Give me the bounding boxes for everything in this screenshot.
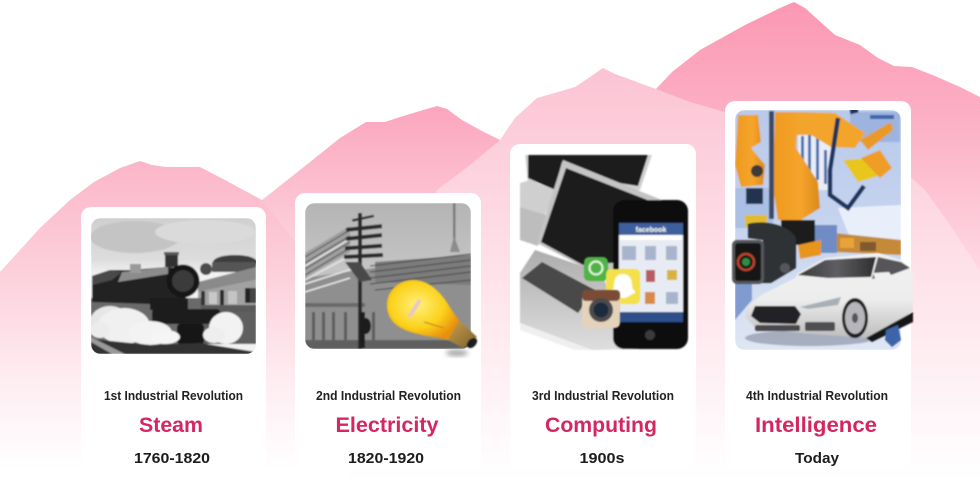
icon: whatsapp bbox=[584, 257, 608, 281]
years: 1900s: 1900s bbox=[580, 451, 624, 467]
heading: Electricity: Electricity bbox=[336, 414, 439, 437]
photo: steam locomotive bbox=[90, 218, 257, 354]
card 2: electricity bbox=[295, 193, 481, 469]
label: 4th revolution: 4th Industrial Revolution bbox=[746, 389, 888, 403]
heading: Computing: Computing bbox=[545, 414, 657, 437]
heading: Intelligence: Intelligence bbox=[755, 414, 877, 437]
years: 1760-1820: 1760-1820 bbox=[134, 451, 210, 467]
card 1: steam bbox=[81, 207, 266, 469]
label: 2nd revolution: 2nd Industrial Revolution bbox=[316, 389, 461, 403]
years: 1820-1920: 1820-1920 bbox=[348, 451, 424, 467]
icon: light bulb bbox=[387, 280, 479, 356]
photo: laptops and smartphone: facebook bbox=[636, 227, 666, 234]
period: Today: Today bbox=[795, 451, 839, 467]
heading: Steam: Steam bbox=[139, 414, 203, 437]
icon: instagram bbox=[582, 290, 620, 328]
icon: snapchat bbox=[606, 269, 640, 304]
label: 1st revolution: 1st Industrial Revolution bbox=[104, 389, 243, 403]
label: 3rd revolution: 3rd Industrial Revolution bbox=[532, 389, 674, 403]
photo: robot arms bbox=[735, 110, 901, 350]
icon: smart watch bbox=[732, 223, 796, 284]
card 4: intelligence bbox=[725, 101, 913, 469]
icon: white electric car bbox=[745, 253, 913, 347]
photo: telegraph pole and buildings bbox=[305, 203, 471, 349]
photo: laptops and smartphone bbox=[520, 155, 688, 350]
card 3: computing bbox=[510, 144, 696, 469]
